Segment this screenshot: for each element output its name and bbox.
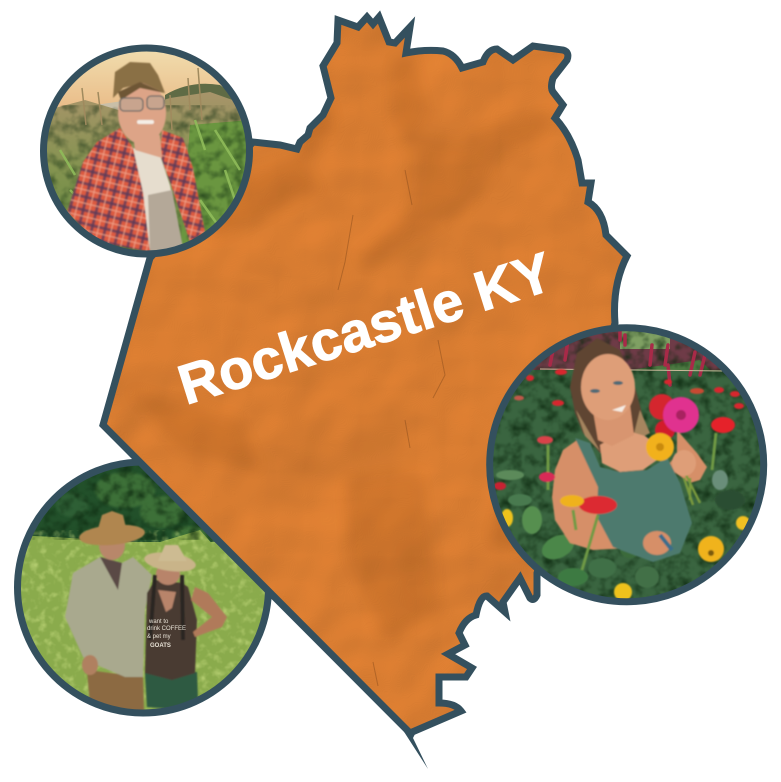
photo: woman with zinnias: [485, 320, 775, 610]
label: Rockcastle KY: Rockcastle KY: [171, 240, 560, 416]
southern spike: [399, 724, 428, 769]
hair: [570, 338, 650, 453]
t-shirt: [132, 147, 172, 250]
right arm: [667, 430, 707, 483]
hand and stems: [684, 475, 700, 505]
flowers: [494, 369, 750, 601]
shirt text: want to: [148, 619, 169, 625]
face: [581, 354, 635, 420]
head: [133, 135, 162, 158]
neck: [592, 405, 634, 446]
tank top: [575, 438, 692, 562]
photo: farmer in corn field: [40, 45, 255, 260]
shirt text: & pet my: [147, 634, 171, 640]
shirt text: [147, 619, 186, 649]
man: [65, 511, 152, 712]
photo: couple in meadow: [14, 459, 272, 716]
map outline: [103, 17, 627, 733]
leaves: [496, 470, 745, 588]
shirt text: GOATS: [150, 643, 171, 649]
woman: [143, 545, 227, 709]
map: Rockcastle county: [90, 0, 650, 782]
paper texture fill: [107, 22, 623, 729]
left arm and torso skin: [551, 440, 618, 551]
shirt text: drink COFFEE: [147, 626, 186, 632]
flannel: [67, 128, 150, 252]
